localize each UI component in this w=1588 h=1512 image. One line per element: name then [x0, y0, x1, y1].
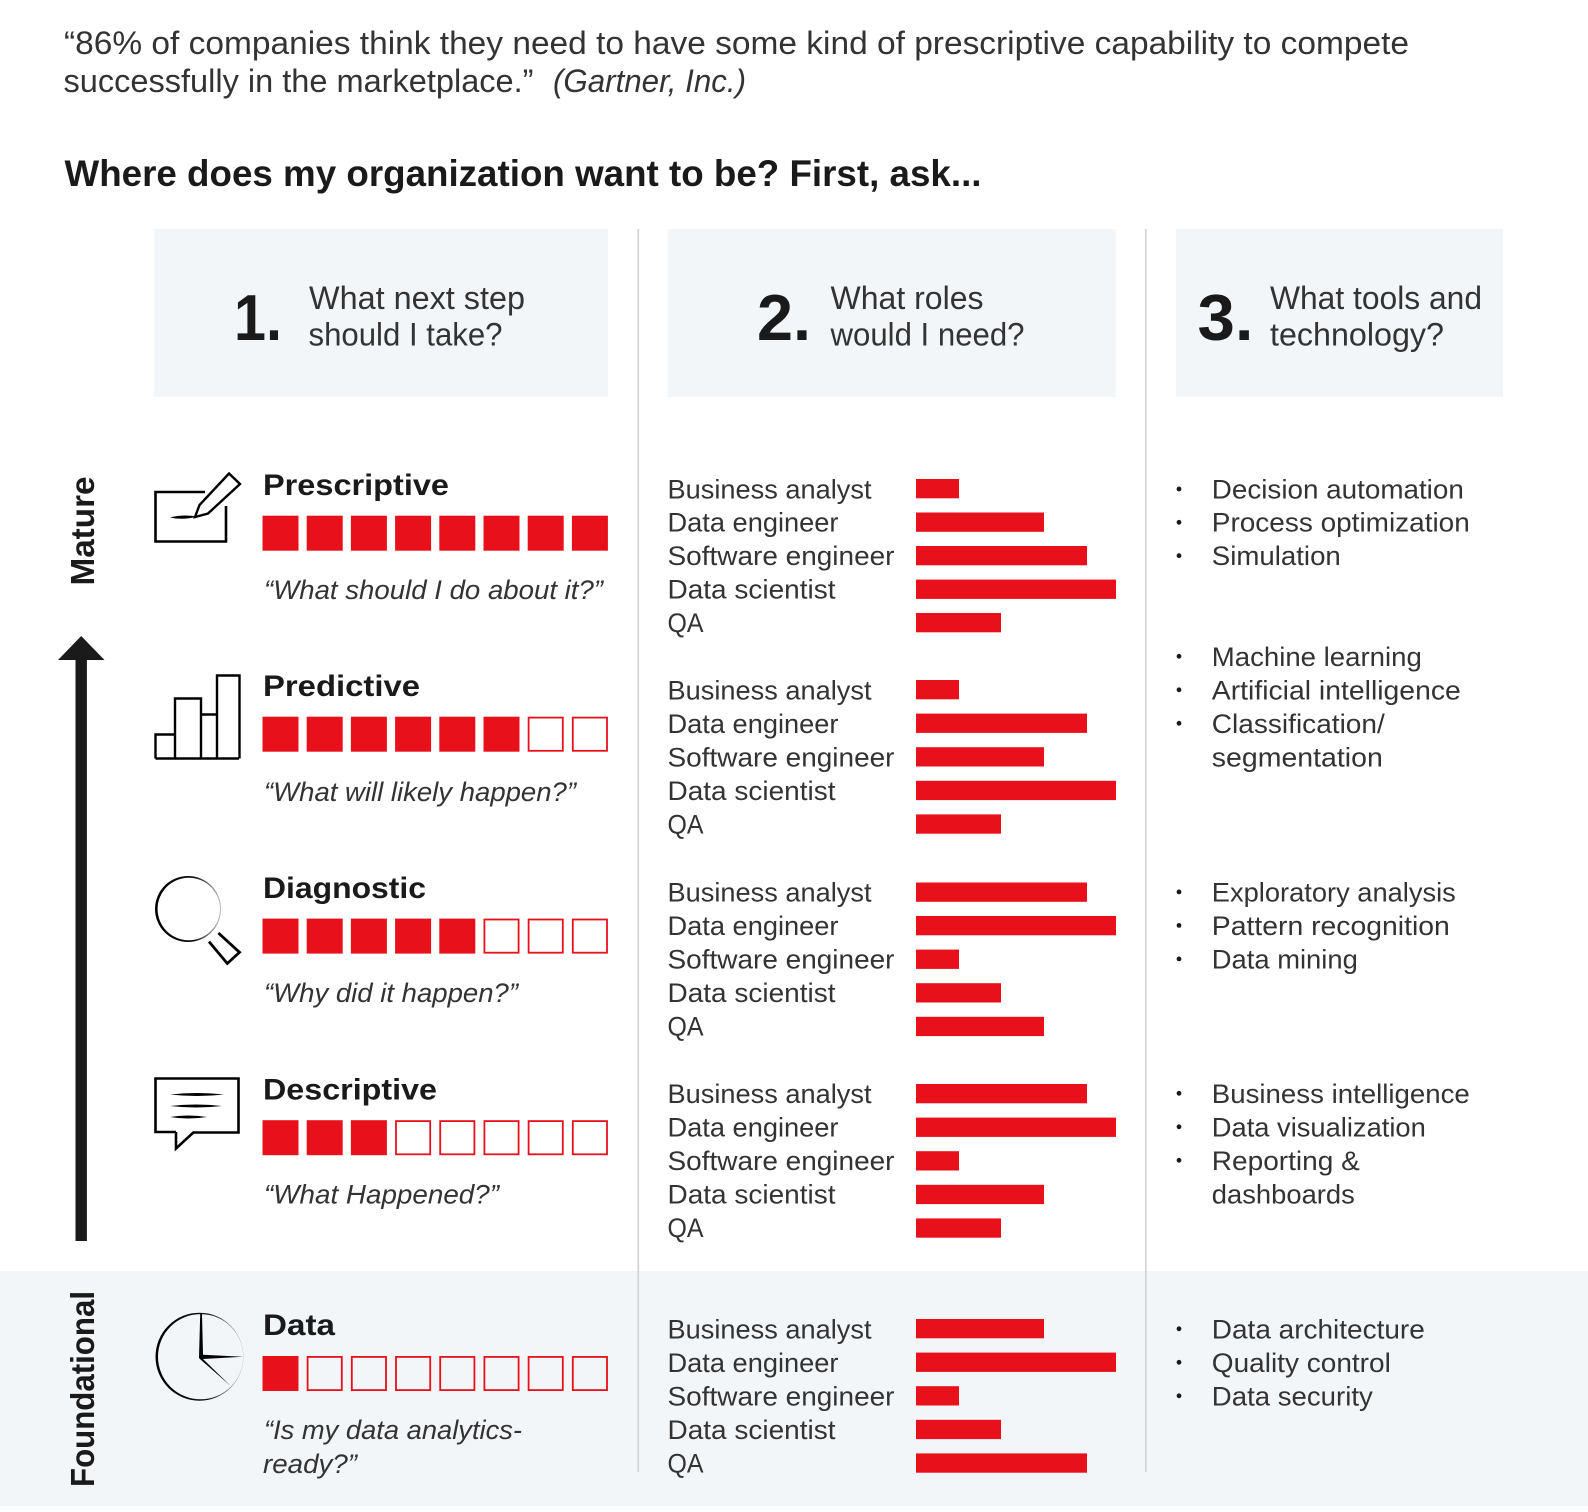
row: Predictive [156, 670, 607, 807]
quote text: successfully in the marketplace.” [64, 63, 534, 99]
tools list: Data: Quality control [1212, 1348, 1391, 1378]
tools list: Predictive [1177, 642, 1461, 772]
roles chart: Descriptive [668, 1079, 1116, 1243]
tools list: Prescriptive [1177, 474, 1470, 571]
roles chart: Predictive: QA [668, 810, 704, 840]
tools list: Diagnostic: Data mining [1212, 944, 1358, 974]
tools list: Descriptive: dashboards [1212, 1179, 1355, 1209]
icon: clock [156, 1313, 244, 1401]
rating: 8 of 8 [262, 516, 608, 551]
foundational background band [0, 1271, 1588, 1506]
heading: Predictive: Predictive [263, 670, 420, 703]
tools list: Data: Data security [1212, 1381, 1373, 1411]
quote text: “86% of companies think they need to have some kind of prescriptive capability to compete [64, 25, 1409, 61]
roles chart: Prescriptive [668, 474, 1116, 638]
roles chart: Predictive: Business analyst [668, 675, 872, 705]
rating: 6 of 8 [262, 717, 607, 752]
question: Data [263, 1415, 522, 1479]
tools list: Descriptive: Business intelligence [1212, 1079, 1470, 1109]
heading: Prescriptive: Prescriptive [263, 469, 449, 502]
row: Descriptive [156, 1074, 607, 1210]
label: Foundational: Foundational [64, 1291, 101, 1487]
row: Diagnostic [155, 872, 607, 1008]
tools list: Descriptive [1177, 1079, 1470, 1209]
rating: 3 of 8 [262, 1120, 607, 1155]
heading: Diagnostic: Diagnostic [263, 872, 426, 905]
icon: magnifying glass [155, 876, 240, 964]
panel: question 1 [154, 229, 608, 397]
roles chart: Predictive [668, 675, 1116, 840]
roles chart: Predictive: Software engineer [668, 742, 895, 772]
panel: question 2: would I need? [830, 316, 1024, 352]
roles chart: Diagnostic [668, 877, 1116, 1041]
panel: question 3: What tools and [1270, 280, 1482, 316]
roles chart: Diagnostic: Data engineer [668, 911, 839, 941]
tools list: Data: Data architecture [1212, 1314, 1425, 1344]
tools list: Prescriptive: Decision automation [1212, 474, 1464, 504]
tools list: Data [1177, 1314, 1425, 1411]
panel: question 2: 2. [757, 281, 811, 354]
quote text: (Gartner, Inc.) [553, 63, 746, 99]
quote text [64, 25, 1409, 99]
row: Data [156, 1309, 607, 1479]
tools list: Predictive: Machine learning [1212, 642, 1422, 672]
label: Mature: Mature [64, 477, 101, 586]
roles chart: Prescriptive: QA [668, 608, 704, 638]
heading: Where does my organization want to be? First, ask... [64, 153, 982, 194]
tools list: Prescriptive: Process optimization [1212, 508, 1470, 538]
roles chart: Data: QA [668, 1448, 704, 1478]
roles chart: Descriptive: Data scientist [668, 1179, 836, 1209]
panel: question 3 [1176, 229, 1503, 397]
tools list: Diagnostic: Pattern recognition [1212, 911, 1450, 941]
tools list: Descriptive: Reporting & [1212, 1146, 1360, 1176]
heading: Data: Data [263, 1309, 335, 1342]
roles chart: Diagnostic: Business analyst [668, 877, 872, 907]
roles chart: Data: Software engineer [668, 1381, 895, 1411]
icon: pencil on checkbox [156, 474, 240, 542]
question: Prescriptive: “What should I do about it?” [264, 575, 604, 605]
icon: speech bubble [156, 1078, 238, 1148]
panel: question 3: 3. [1198, 281, 1254, 354]
roles chart: Prescriptive: Data engineer [668, 508, 839, 538]
question: Predictive: “What will likely happen?” [264, 777, 577, 807]
rating: 1 of 8 [262, 1356, 607, 1391]
roles chart: Descriptive: QA [668, 1213, 704, 1243]
roles chart: Descriptive: Software engineer [668, 1146, 895, 1176]
question: Descriptive: “What Happened?” [264, 1180, 500, 1210]
tools list: Diagnostic: Exploratory analysis [1212, 877, 1456, 907]
tools list: Predictive: Classification/ [1212, 709, 1385, 739]
panel: question 2: What roles [830, 280, 984, 316]
panel: question 1: should I take? [308, 316, 502, 352]
roles chart: Diagnostic: QA [668, 1011, 704, 1041]
roles chart: Predictive: Data engineer [668, 709, 839, 739]
tools list: Predictive: segmentation [1212, 742, 1383, 772]
roles chart: Prescriptive: Business analyst [668, 474, 872, 504]
roles chart: Descriptive: Data engineer [668, 1112, 839, 1142]
tools list: Prescriptive: Simulation [1212, 541, 1341, 571]
rating: 5 of 8 [262, 919, 607, 954]
question: Data: “Is my data analytics- [264, 1415, 522, 1445]
heading: Descriptive: Descriptive [263, 1074, 437, 1106]
divider lines [638, 229, 1147, 1472]
roles chart: Data: Business analyst [668, 1314, 872, 1344]
icon: bar chart [156, 676, 240, 758]
roles chart: Diagnostic: Software engineer [668, 944, 895, 974]
roles chart: Data [668, 1314, 1116, 1478]
roles chart: Predictive: Data scientist [668, 776, 836, 806]
row: Prescriptive [156, 469, 608, 605]
roles chart: Data: Data engineer [668, 1348, 839, 1378]
panel: question 1: 1. [234, 281, 282, 354]
panel: question 3: technology? [1270, 316, 1444, 352]
panel: question 2 [668, 229, 1116, 397]
roles chart: Prescriptive: Data scientist [668, 575, 836, 605]
panel: question 1: What next step [309, 280, 525, 316]
tools list: Diagnostic [1177, 877, 1456, 974]
question: Diagnostic: “Why did it happen?” [264, 978, 519, 1008]
tools list: Predictive: Artificial intelligence [1212, 675, 1461, 705]
question: Data: ready?” [263, 1449, 358, 1479]
tools list: Descriptive: Data visualization [1212, 1112, 1426, 1142]
arrow: maturity axis [58, 636, 104, 1241]
roles chart: Descriptive: Business analyst [668, 1079, 872, 1109]
roles chart: Data: Data scientist [668, 1415, 836, 1445]
roles chart: Diagnostic: Data scientist [668, 978, 836, 1008]
roles chart: Prescriptive: Software engineer [668, 541, 895, 571]
